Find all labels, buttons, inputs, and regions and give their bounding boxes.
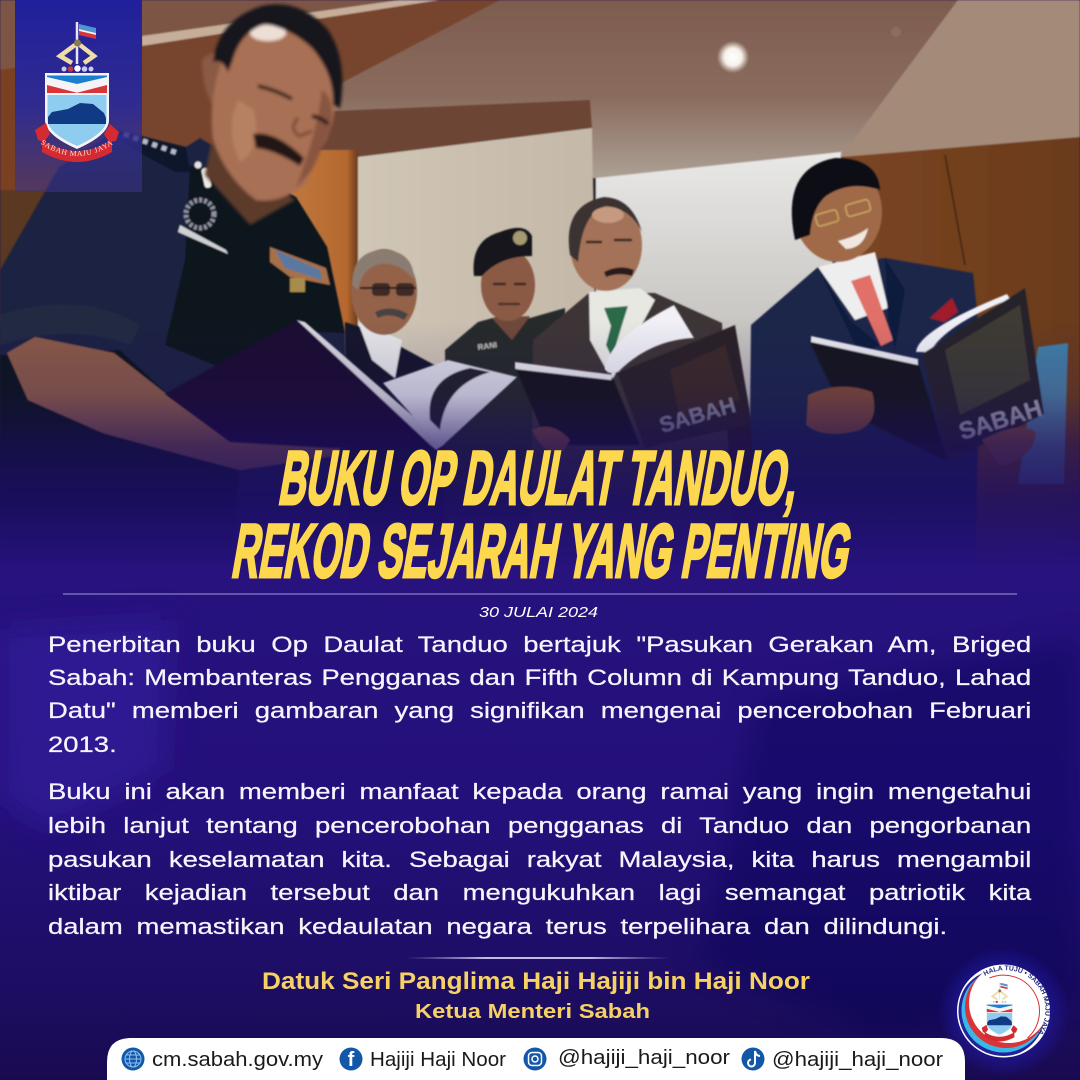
signature bbox=[262, 968, 810, 1023]
icon: Sabah state crest: SABAH MAJU JAYA bbox=[40, 140, 113, 156]
date: 30 JULAI 2024 bbox=[479, 604, 598, 621]
signature: Datuk Seri Panglima Haji Hajiji bin Haji Noor bbox=[262, 968, 810, 995]
title bbox=[227, 437, 858, 594]
paragraph 1: 2013. bbox=[48, 732, 117, 757]
paragraph 2: dalam memastikan kedaulatan negara terus terpelihara dan dilindungi. bbox=[48, 914, 947, 939]
paragraph 2: lebih lanjut tentang pencerobohan pengganas di Tanduo dan pengorbanan bbox=[48, 813, 1031, 838]
tiktok text: @hajiji_haji_noor bbox=[772, 1049, 943, 1071]
paragraph 2: iktibar kejadian tersebut dan mengukuhkan lagi semangat patriotik kita bbox=[48, 880, 1031, 905]
paragraph 2: pasukan keselamatan kita. Sebagai rakyat Malaysia, kita harus mengambil bbox=[48, 847, 1031, 872]
signature: Ketua Menteri Sabah bbox=[415, 1001, 650, 1023]
icon: instagram bbox=[524, 1048, 546, 1070]
person: officer in beret bbox=[445, 228, 570, 580]
room background bbox=[0, 0, 1080, 580]
police officer head bbox=[202, 4, 342, 225]
paragraph 1: Datu" memberi gambaran yang signifikan mengenai pencerobohan Februari bbox=[48, 698, 1031, 723]
instagram text: @hajiji_haji_noor bbox=[558, 1047, 730, 1069]
icon: Sabah state crest bbox=[35, 22, 119, 162]
website text: cm.sabah.gov.my bbox=[152, 1048, 324, 1071]
paragraph 2 bbox=[48, 779, 1032, 939]
book: held by Hajiji: SABAH bbox=[656, 392, 739, 438]
icon: Hala Tuju round logo: HALA TUJU • SABAH MAJU JAYA bbox=[983, 966, 1050, 1034]
dark gradient blending photo into background bbox=[0, 320, 1080, 570]
person: police officer in uniform bbox=[0, 130, 350, 580]
paragraph 1: Penerbitan buku Op Daulat Tanduo bertajuk "Pasukan Gerakan Am, Briged bbox=[48, 632, 1031, 657]
social media bar bbox=[107, 1038, 965, 1080]
background panel bbox=[0, 565, 1080, 1080]
person: official in suit with glasses bbox=[345, 249, 445, 580]
book: held by police officer bbox=[165, 320, 517, 450]
icon: facebook: f bbox=[348, 1049, 355, 1071]
icon: facebook bbox=[340, 1048, 362, 1071]
icon: Hala Tuju round logo bbox=[957, 964, 1050, 1058]
book: held by man in navy suit bbox=[806, 288, 1068, 484]
person: Hajiji in grey suit with book bbox=[530, 197, 735, 580]
icon: website globe bbox=[122, 1048, 144, 1070]
paragraph 2: Buku ini akan memberi manfaat kepada orang ramai yang ingin mengetahui bbox=[48, 779, 1031, 804]
icon: tiktok bbox=[742, 1048, 764, 1070]
divider above signature bbox=[406, 957, 670, 959]
blue band behind crest bbox=[15, 0, 142, 192]
person: officer in beret: RANI bbox=[477, 340, 498, 352]
book: held by Hajiji bbox=[515, 305, 752, 456]
paragraph 1 bbox=[48, 632, 1031, 757]
paragraph 1: Sabah: Membanteras Pengganas dan Fifth Column di Kampung Tanduo, Lahad bbox=[48, 665, 1031, 690]
book: held by man in navy suit: SABAH bbox=[956, 395, 1045, 446]
divider line bbox=[63, 593, 1017, 595]
facebook text: Hajiji Haji Noor bbox=[370, 1049, 506, 1071]
person: man in navy suit with pink tie bbox=[750, 158, 980, 580]
